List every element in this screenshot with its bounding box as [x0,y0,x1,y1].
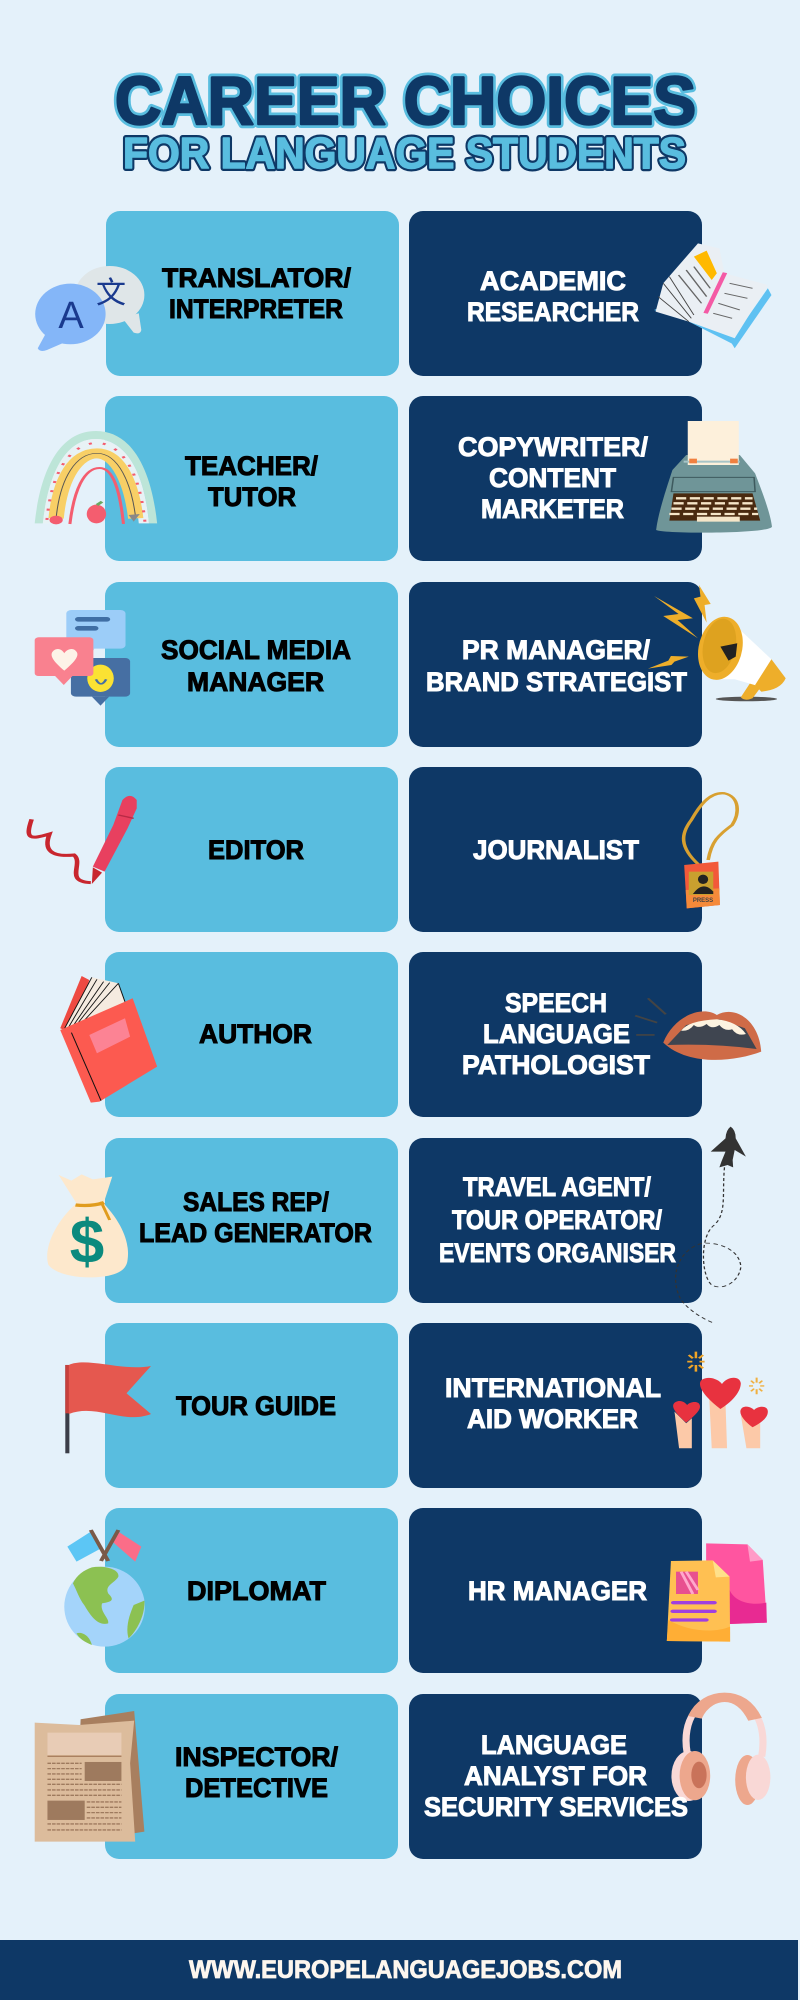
icon: red flag [65,1362,151,1453]
icon: megaphone [648,585,786,701]
icon: money bag [47,1174,128,1277]
label [426,635,687,697]
label: SPEECH [505,988,607,1018]
label: SECURITY SERVICES [424,1792,688,1822]
icon: globe with flags [64,1530,145,1647]
label: TEACHER/ [185,451,318,481]
label: LANGUAGE [483,1019,630,1049]
label [185,451,318,512]
label: AUTHOR [199,1019,312,1049]
label: AID WORKER [467,1404,638,1434]
panel: travel agent [409,1127,746,1323]
panel: diplomat [64,1508,398,1673]
panel: author [60,952,398,1117]
icon: translation speech bubbles: A [58,295,84,337]
label: INTERPRETER [169,294,343,324]
label: TRANSLATOR/ [162,263,351,293]
panel: inspector [35,1694,398,1859]
icon: headphones [671,1697,770,1805]
panel: tour guide [65,1323,398,1488]
label [162,263,351,324]
panel: social media [35,582,398,747]
icon: chat bubbles [35,610,130,706]
icon: documents [667,1543,767,1642]
panel: translator [35,211,399,376]
label: SOCIAL MEDIA [161,635,351,665]
panel: journalist [409,767,737,932]
panel: international aid worker [409,1323,768,1488]
label: EDITOR [208,835,304,865]
label: MANAGER [187,667,324,697]
icon: red book [60,976,157,1103]
label: BRAND STRATEGIST [426,667,687,697]
label: ANALYST FOR [464,1761,647,1791]
icon: hands holding hearts [673,1352,768,1448]
icon: translation speech bubbles [35,266,144,351]
label: EVENTS ORGANISER [439,1238,676,1268]
panel: academic researcher [409,211,771,376]
label: INTERNATIONAL [445,1373,661,1403]
label: PR MANAGER/ [462,635,650,665]
label: PATHOLOGIST [462,1050,650,1080]
icon: rainbow [35,431,157,524]
icon: newspaper [35,1711,144,1842]
label [139,1187,372,1248]
label [458,432,648,524]
panel: copywriter [409,396,772,561]
title: CAREER CHOICES [115,63,696,139]
label: TUTOR [208,482,296,512]
panel: hr manager [409,1508,767,1673]
icon: airplane with dashed route [676,1127,746,1323]
icon: money bag: $ [70,1208,104,1277]
title [115,63,696,178]
label: JOURNALIST [473,835,639,865]
icon: press badge [684,793,737,908]
icon: press badge: PRESS [693,898,713,904]
label [439,1172,676,1268]
icon: open mouth [635,998,761,1060]
icon: open book [654,243,771,348]
label: DETECTIVE [185,1773,328,1803]
footer [0,1940,798,2000]
label: TRAVEL AGENT/ [463,1172,651,1202]
icon: translation speech bubbles: 文 [96,268,126,312]
panel: teacher [35,396,398,561]
panel: language analyst [409,1694,770,1859]
label: INSPECTOR/ [175,1742,338,1772]
label: CONTENT [489,463,616,493]
label: LEAD GENERATOR [139,1218,372,1248]
label: COPYWRITER/ [458,432,648,462]
label [424,1730,688,1822]
label [161,635,351,697]
title: CAREER CHOICES [115,63,696,139]
label: MARKETER [481,494,624,524]
label: SALES REP/ [183,1187,329,1217]
subtitle: FOR LANGUAGE STUDENTS [123,129,686,178]
label: TOUR GUIDE [176,1391,336,1421]
label: TOUR OPERATOR/ [452,1205,662,1235]
subtitle: FOR LANGUAGE STUDENTS [123,129,686,178]
panel: sales rep [47,1138,398,1303]
label [467,266,639,327]
icon: red pen [29,796,137,884]
footer url: WWW.EUROPELANGUAGEJOBS.COM [189,1956,622,1984]
label [462,988,650,1080]
panel: pr manager [409,582,786,747]
label: DIPLOMAT [187,1576,327,1606]
label [175,1742,338,1803]
icon: typewriter [656,421,772,533]
label: ACADEMIC [480,266,626,296]
label [445,1373,661,1434]
label: HR MANAGER [468,1576,647,1606]
label: RESEARCHER [467,297,639,327]
label: LANGUAGE [481,1730,627,1760]
panel: editor [29,767,398,932]
panel: speech language pathologist [409,952,761,1117]
